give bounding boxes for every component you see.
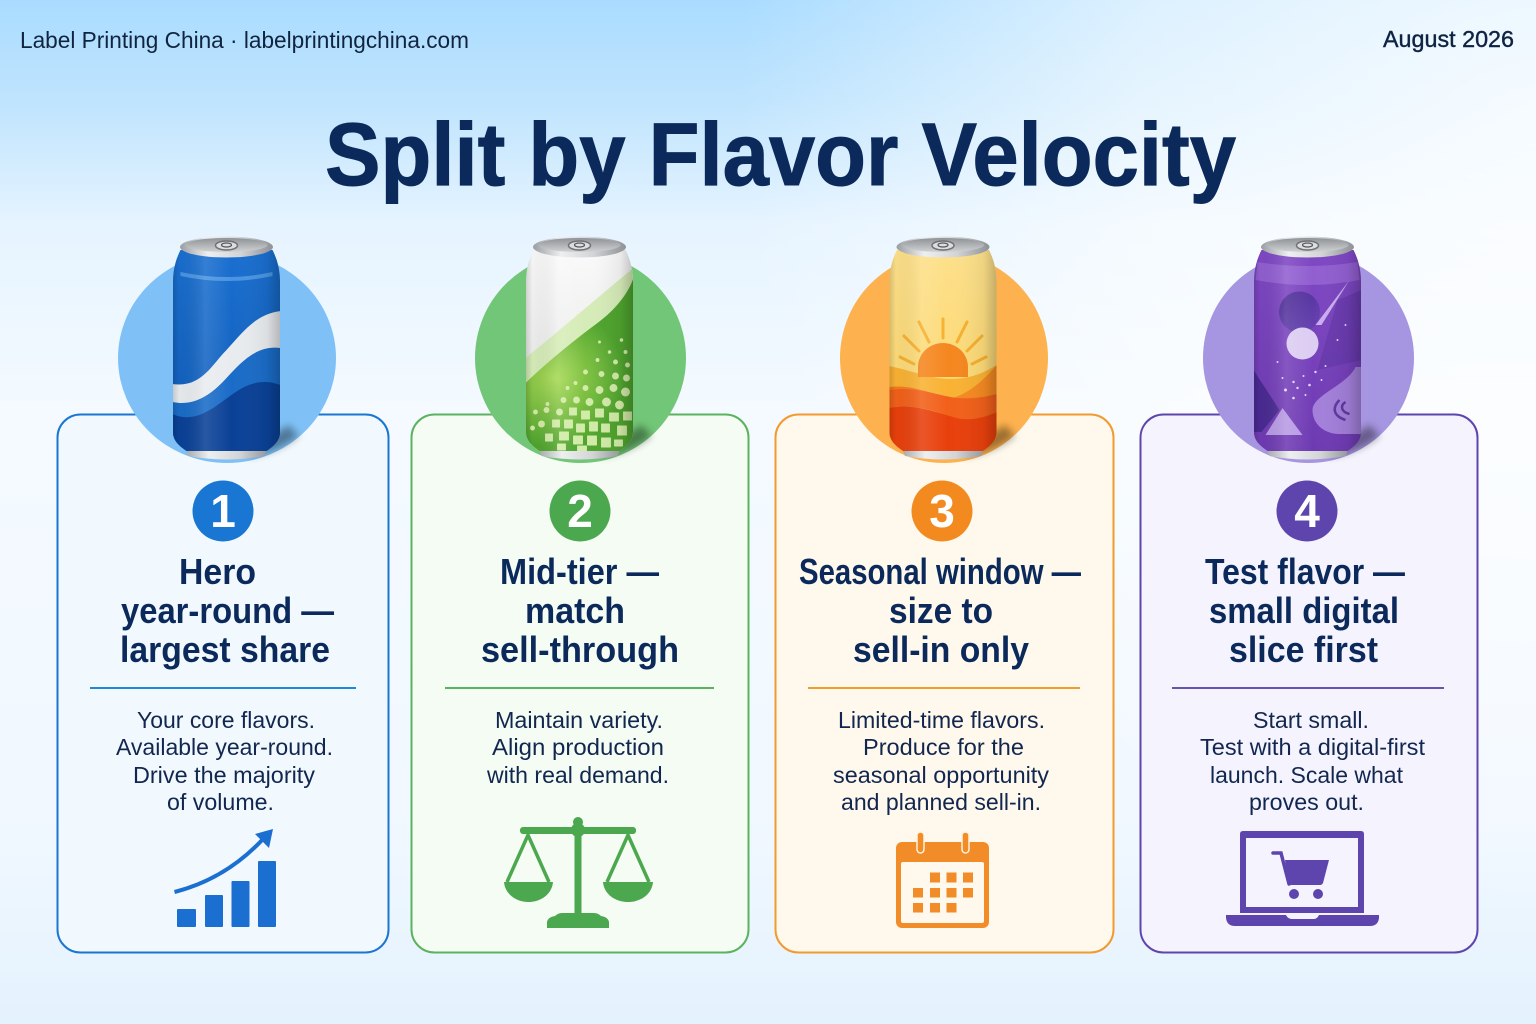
- body text: [833, 707, 1049, 815]
- heading: Mid-tier —: [500, 551, 659, 592]
- icon: laptop with cart: [1226, 831, 1379, 926]
- can backdrop circle: [840, 253, 1048, 463]
- body text: Maintain variety.: [495, 707, 663, 733]
- icon: yellow sunset can: [889, 236, 1015, 460]
- panel: test flavor: [1140, 236, 1478, 952]
- body text: Align production: [492, 734, 664, 760]
- icon: growth chart: [174, 829, 276, 927]
- badge 2: 2: [567, 485, 593, 537]
- icon: balance scale: [504, 817, 653, 928]
- icon: calendar: [896, 832, 989, 928]
- heading: match: [525, 590, 625, 631]
- card: [412, 414, 748, 952]
- body text: with real demand.: [486, 762, 669, 788]
- body text: proves out.: [1249, 789, 1364, 815]
- heading: size to: [889, 590, 993, 631]
- body text: Drive the majority: [133, 762, 316, 788]
- heading: [799, 551, 1081, 670]
- icon: purple can: [1254, 236, 1380, 460]
- body text: Test with a digital-first: [1200, 734, 1426, 760]
- panel: mid-tier: [412, 236, 748, 952]
- badge 3: [912, 480, 972, 542]
- heading: [1205, 551, 1405, 670]
- body text: of volume.: [167, 789, 274, 815]
- body text: [116, 707, 333, 815]
- body text: Start small.: [1253, 707, 1369, 733]
- body text: Limited-time flavors.: [838, 707, 1045, 733]
- heading: Seasonal window —: [799, 551, 1081, 592]
- heading: largest share: [120, 629, 330, 670]
- badge 1: 1: [210, 485, 236, 537]
- body text: Available year-round.: [116, 734, 333, 760]
- can backdrop circle: [1203, 253, 1414, 463]
- heading: small digital: [1209, 590, 1399, 631]
- title: Split by Flavor Velocity: [325, 104, 1236, 204]
- can backdrop circle: [118, 253, 336, 463]
- body text: Produce for the: [863, 734, 1024, 760]
- body text: Your core flavors.: [137, 707, 315, 733]
- heading: sell-in only: [853, 629, 1029, 670]
- heading: [481, 551, 679, 670]
- panel: hero year-round: [58, 236, 388, 952]
- card: [58, 414, 388, 952]
- card: [776, 414, 1114, 952]
- badge 1: [192, 480, 254, 542]
- badge 2: [550, 480, 610, 542]
- badge 4: 4: [1294, 485, 1320, 537]
- heading: Hero: [179, 551, 256, 592]
- heading: Test flavor —: [1205, 551, 1405, 592]
- body text: [486, 707, 669, 788]
- body text: and planned sell-in.: [841, 789, 1041, 815]
- icon: blue can: [172, 236, 298, 460]
- brand line: Label Printing China · labelprintingchina.com: [20, 27, 469, 53]
- heading: slice first: [1229, 629, 1378, 670]
- panel: seasonal window: [776, 236, 1114, 952]
- heading: sell-through: [481, 629, 679, 670]
- date: August 2026: [1383, 26, 1514, 52]
- card: [1140, 414, 1478, 952]
- badge 4: [1276, 480, 1338, 542]
- icon: green can: [526, 236, 652, 460]
- heading: year-round —: [121, 590, 334, 631]
- heading: [120, 551, 334, 670]
- body text: launch. Scale what: [1210, 762, 1404, 788]
- badge 3: 3: [929, 485, 955, 537]
- body text: [1200, 707, 1426, 815]
- can backdrop circle: [475, 253, 686, 463]
- body text: seasonal opportunity: [833, 762, 1049, 788]
